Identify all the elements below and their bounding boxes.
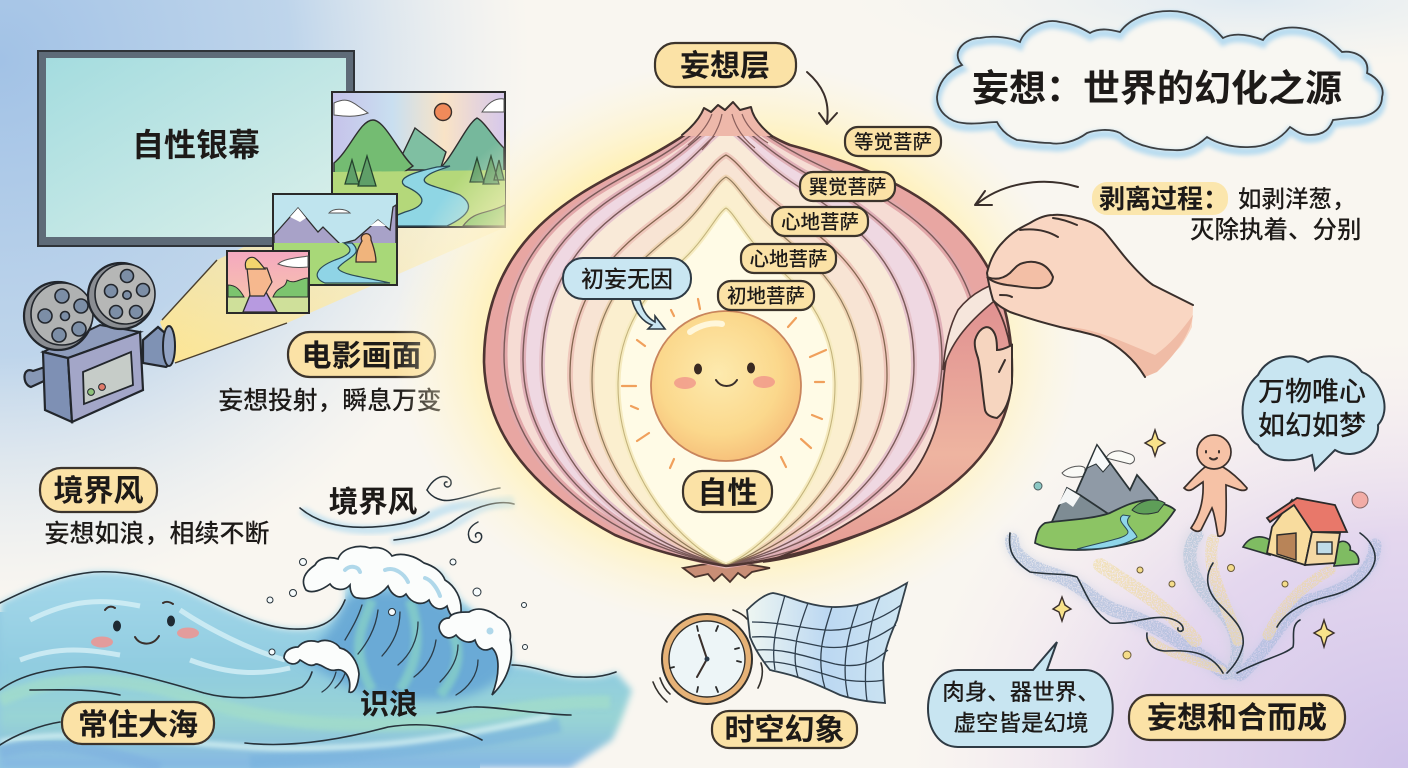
speech cloud: all is mind	[1243, 356, 1385, 470]
title: 妄想：世界的幻化之源	[972, 68, 1342, 109]
watercolor wash: blue top-left	[0, 0, 560, 620]
icon: warped spacetime grid	[747, 583, 907, 703]
text: peeling description: 如剥洋葱，	[1238, 186, 1356, 212]
label: wind text: 境界风	[329, 486, 418, 519]
hand outline	[987, 215, 1193, 377]
callout: all is illusion: 肉身、器世界、	[942, 680, 1100, 705]
wave face	[91, 602, 199, 648]
panel: title cloud	[937, 11, 1383, 154]
wrist shading	[1060, 315, 1193, 377]
floating balloon	[1352, 492, 1368, 508]
label: consciousness wave: 识浪	[360, 688, 418, 721]
tag: bodhisattva stage 4	[741, 244, 836, 273]
picture: small portrait	[227, 251, 309, 313]
label: realm wind	[40, 468, 157, 512]
small figure	[1184, 435, 1247, 536]
callout: all is illusion	[928, 642, 1113, 747]
tag: bodhisattva stage 4: 心地菩萨	[749, 248, 828, 270]
label: peeling process: 剥离过程：	[1099, 184, 1229, 214]
label: delusion layers: 妄想层	[680, 50, 770, 83]
icon: smiling sun core	[622, 299, 826, 468]
text: peeling description	[1190, 186, 1362, 244]
swirling sand: speckle	[1012, 535, 1375, 675]
swirling sand: soft tint	[1012, 535, 1375, 675]
gold dots	[1123, 564, 1288, 659]
tag: bodhisattva stage 5	[718, 281, 814, 310]
hand peeling the onion	[943, 215, 1193, 418]
hand	[987, 215, 1193, 377]
arrow: to onion layers	[807, 72, 837, 124]
onion glow	[393, 60, 1083, 630]
sea body	[0, 570, 632, 768]
label: spacetime illusion: 时空幻象	[724, 714, 844, 747]
finger fold	[987, 262, 1053, 288]
floating globe	[1034, 482, 1042, 490]
sparkle: lower-right	[1314, 620, 1334, 647]
label: delusion layers	[655, 43, 796, 87]
onion layers	[484, 110, 1012, 566]
panel: self-nature screen	[38, 51, 354, 246]
icon: clock	[653, 610, 762, 704]
tag: bodhisattva stage 2: 巽觉菩萨	[808, 176, 887, 198]
tag: bodhisattva stage 3: 心地菩萨	[781, 212, 859, 234]
onion neck	[680, 102, 772, 150]
sea base under soft edge	[0, 612, 480, 768]
tag: bodhisattva stage 3	[772, 207, 868, 236]
panel: projector beam	[160, 130, 510, 363]
watercolor wash: pale blue top-right	[840, 0, 1408, 80]
sparkle: top	[1145, 430, 1165, 456]
arrow: to peel	[975, 182, 1078, 205]
icon: film projector	[24, 263, 175, 422]
label: combined from delusion: 妄想和合而成	[1147, 702, 1327, 735]
knuckle lines	[1000, 218, 1077, 297]
callout: beginningless delusion: 初妄无因	[581, 266, 673, 292]
icon: onion	[484, 102, 1012, 582]
label: film images: 电影画面	[302, 340, 422, 373]
floating mountain island	[1035, 445, 1175, 550]
spray drops	[267, 558, 528, 655]
onion roots	[683, 562, 770, 582]
tag: bodhisattva stage 2	[800, 172, 895, 201]
caption: realm wind: 妄想如浪，相续不断	[44, 520, 270, 548]
caption: film images: 妄想投射，瞬息万变	[218, 387, 442, 415]
thumb	[975, 327, 1012, 418]
screen label: 自性银幕	[132, 127, 260, 163]
tag: bodhisattva stage 5: 初地菩萨	[727, 286, 805, 308]
speech cloud: all is mind: 如幻如梦	[1258, 411, 1366, 441]
picture: large landscape	[332, 92, 505, 227]
icon: wind swirls	[300, 477, 514, 542]
wave ink lines	[0, 572, 616, 745]
tag: bodhisattva stage 1: 等觉菩萨	[854, 132, 932, 154]
label: self-nature	[683, 471, 772, 512]
illusory world scene	[1010, 430, 1375, 675]
label: realm wind: 境界风	[54, 475, 144, 508]
label: abiding ocean	[62, 702, 214, 744]
floating house	[1243, 498, 1359, 566]
main foam crest	[303, 546, 461, 618]
speech cloud: all is mind: 万物唯心	[1258, 377, 1366, 407]
label: film images	[288, 332, 435, 377]
watercolor wash: lavender bottom-right	[900, 330, 1408, 768]
label: self-nature: 自性	[698, 477, 758, 510]
callout: beginningless delusion	[563, 258, 691, 329]
label: abiding ocean: 常住大海	[78, 709, 198, 742]
right foam crest	[439, 609, 511, 695]
sparkle: lower-left	[1053, 597, 1071, 621]
text: peeling description: 灭除执着、分别	[1190, 216, 1362, 244]
tag: bodhisattva stage 1	[845, 127, 941, 156]
small foam crest	[284, 640, 359, 692]
callout: all is illusion: 虚空皆是幻境	[953, 711, 1089, 736]
panel: ocean wave	[0, 546, 632, 768]
peeled skin strip	[943, 277, 1023, 370]
swirl ink lines	[1010, 533, 1375, 673]
label: combined from delusion	[1129, 695, 1345, 740]
onion outer outline	[484, 110, 1012, 566]
peeled outer lobe	[763, 292, 1012, 562]
picture: middle landscape	[273, 194, 397, 285]
